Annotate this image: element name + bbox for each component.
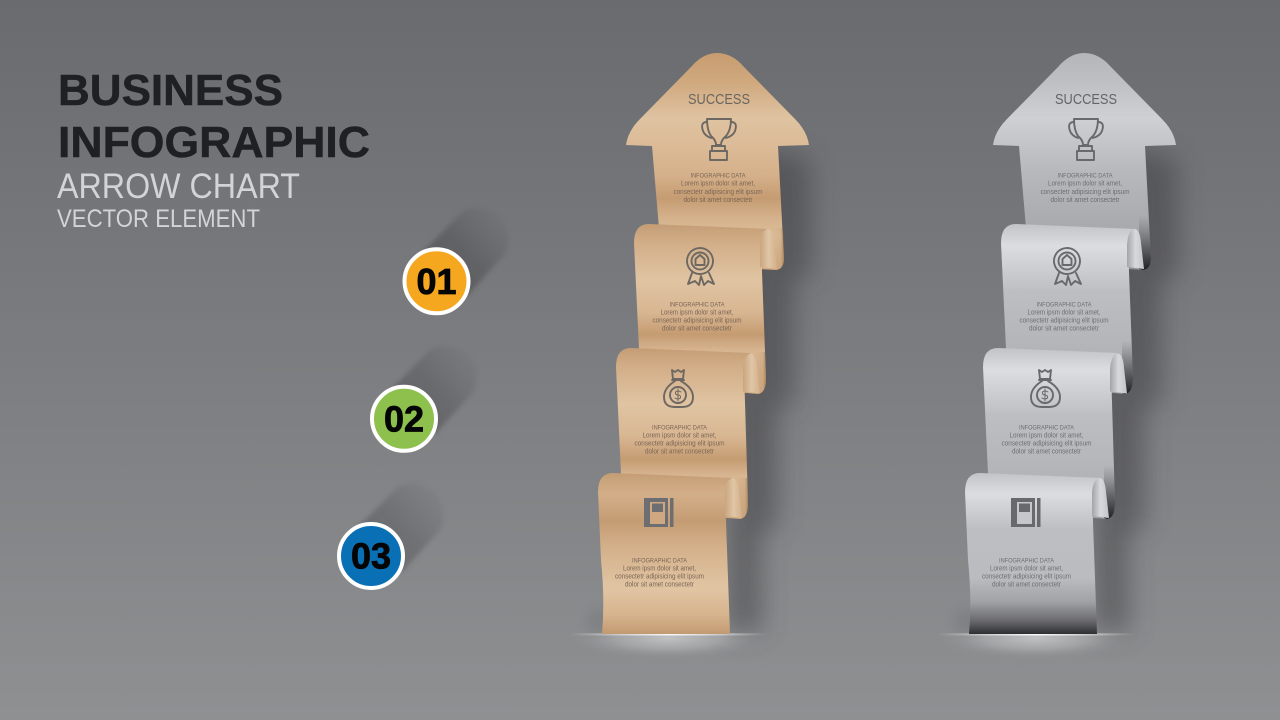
silver ribbon arrow <box>931 53 1179 660</box>
ribbon segment 3 <box>983 348 1127 519</box>
text: segment 3 <box>1002 424 1092 456</box>
text: success details: consectetr adipisicing elit ipsum <box>1040 187 1130 196</box>
text: success details: consectetr adipisicing elit ipsum <box>674 187 763 196</box>
text: segment 4: Lorem ipsm dolor sit amet, <box>990 564 1063 572</box>
text: segment 4: INFOGRAPHIC DATA <box>632 558 688 564</box>
floor glow <box>944 633 1129 654</box>
text: success details: Lorem ipsm dolor sit amet, <box>681 178 755 188</box>
text: success details: INFOGRAPHIC DATA <box>690 172 746 180</box>
arrow tail dark tip <box>1139 215 1151 270</box>
text: success details: INFOGRAPHIC DATA <box>1058 172 1113 180</box>
badge 01: 01 <box>416 261 457 302</box>
text: success details <box>1040 172 1130 204</box>
column shadow <box>1095 150 1179 632</box>
subheading: arrow chart: ARROW CHART <box>57 167 300 206</box>
text: segment 3: dolor sit amet consectetr <box>1012 446 1082 456</box>
ribbon segment 3 <box>616 348 760 519</box>
ribbon segment 4 <box>965 473 1109 634</box>
tan ribbon arrow <box>564 53 812 660</box>
text: segment 2: consectetr adipisicing elit ipsum <box>652 316 742 324</box>
badge 02 <box>372 346 477 451</box>
text: success details: dolor sit amet consectetr <box>684 195 753 204</box>
arrow head panel <box>993 53 1176 270</box>
text: segment 4 <box>615 558 704 588</box>
text: segment 3: INFOGRAPHIC DATA <box>652 424 708 432</box>
arrow head title: SUCCESS <box>688 92 750 108</box>
left foot shadow <box>586 610 614 634</box>
arrow tail shading <box>772 228 784 270</box>
text: segment 2 <box>652 302 742 332</box>
text: segment 2: consectetr adipisicing elit ipsum <box>1020 316 1109 324</box>
text: segment 2: dolor sit amet consectetr <box>1029 324 1100 332</box>
subheading: vector element: VECTOR ELEMENT <box>57 205 260 233</box>
curl <box>760 229 777 269</box>
badge 03: 03 <box>351 536 391 577</box>
curl <box>743 354 760 394</box>
text: segment 2: Lorem ipsm dolor sit amet, <box>1028 308 1100 316</box>
text: segment 4: dolor sit amet consectetr <box>992 580 1062 588</box>
curl <box>1092 478 1109 518</box>
badge 01 <box>404 208 509 313</box>
left foot shadow <box>953 610 981 634</box>
icon: money bag <box>664 370 693 407</box>
text: segment 4 <box>982 558 1071 588</box>
ribbon segment 2 <box>1001 224 1144 394</box>
text: success details: dolor sit amet consectetr <box>1050 195 1120 204</box>
tail shading <box>737 478 748 519</box>
text: segment 2: INFOGRAPHIC DATA <box>670 302 725 308</box>
text: segment 3: consectetr adipisicing elit ipsum <box>1002 438 1092 448</box>
tail dark tip <box>1104 465 1115 519</box>
arrow head title: SUCCESS <box>1055 92 1117 108</box>
ribbon segment 4 <box>598 473 742 634</box>
icon: medal <box>687 248 714 285</box>
text: segment 3: consectetr adipisicing elit ipsum <box>634 438 725 448</box>
text: segment 2: dolor sit amet consectetr <box>662 324 733 332</box>
text: segment 2 <box>1020 302 1109 332</box>
icon: book <box>1011 498 1040 527</box>
ribbon segment 2 <box>634 224 777 394</box>
text: segment 3: dolor sit amet consectetr <box>645 446 715 456</box>
text: segment 4: Lorem ipsm dolor sit amet, <box>623 564 696 572</box>
text: success details <box>674 172 763 204</box>
column shadow <box>728 150 812 632</box>
text: segment 3: INFOGRAPHIC DATA <box>1019 424 1075 432</box>
icon: trophy <box>1069 119 1103 160</box>
curl <box>725 478 742 518</box>
icon: money bag <box>1031 370 1060 407</box>
text: segment 4: INFOGRAPHIC DATA <box>999 558 1055 564</box>
text: segment 4: dolor sit amet consectetr <box>625 580 695 588</box>
text: segment 4: consectetr adipisicing elit ipsum <box>982 572 1071 580</box>
curl <box>1110 354 1127 394</box>
badge 03 <box>339 484 444 588</box>
floor glow <box>576 633 762 654</box>
arrow head panel <box>626 53 809 270</box>
heading: business: BUSINESS <box>58 66 283 115</box>
text: segment 4: consectetr adipisicing elit ipsum <box>615 572 704 580</box>
icon: trophy <box>702 119 736 160</box>
title block <box>57 66 370 233</box>
text: segment 3: Lorem ipsm dolor sit amet, <box>1010 430 1084 440</box>
badge 02: 02 <box>384 398 424 440</box>
tail dark tip <box>1122 340 1133 394</box>
text: segment 2: Lorem ipsm dolor sit amet, <box>660 308 734 316</box>
text: segment 3: Lorem ipsm dolor sit amet, <box>642 430 716 440</box>
text: success details: Lorem ipsm dolor sit amet, <box>1048 178 1122 188</box>
heading: infographic: INFOGRAPHIC <box>58 118 370 167</box>
curl <box>1127 229 1144 269</box>
icon: book <box>644 498 674 527</box>
tail shading <box>755 352 766 394</box>
icon: medal <box>1054 248 1081 285</box>
text: segment 2: INFOGRAPHIC DATA <box>1036 302 1092 308</box>
text: segment 3 <box>634 424 725 456</box>
